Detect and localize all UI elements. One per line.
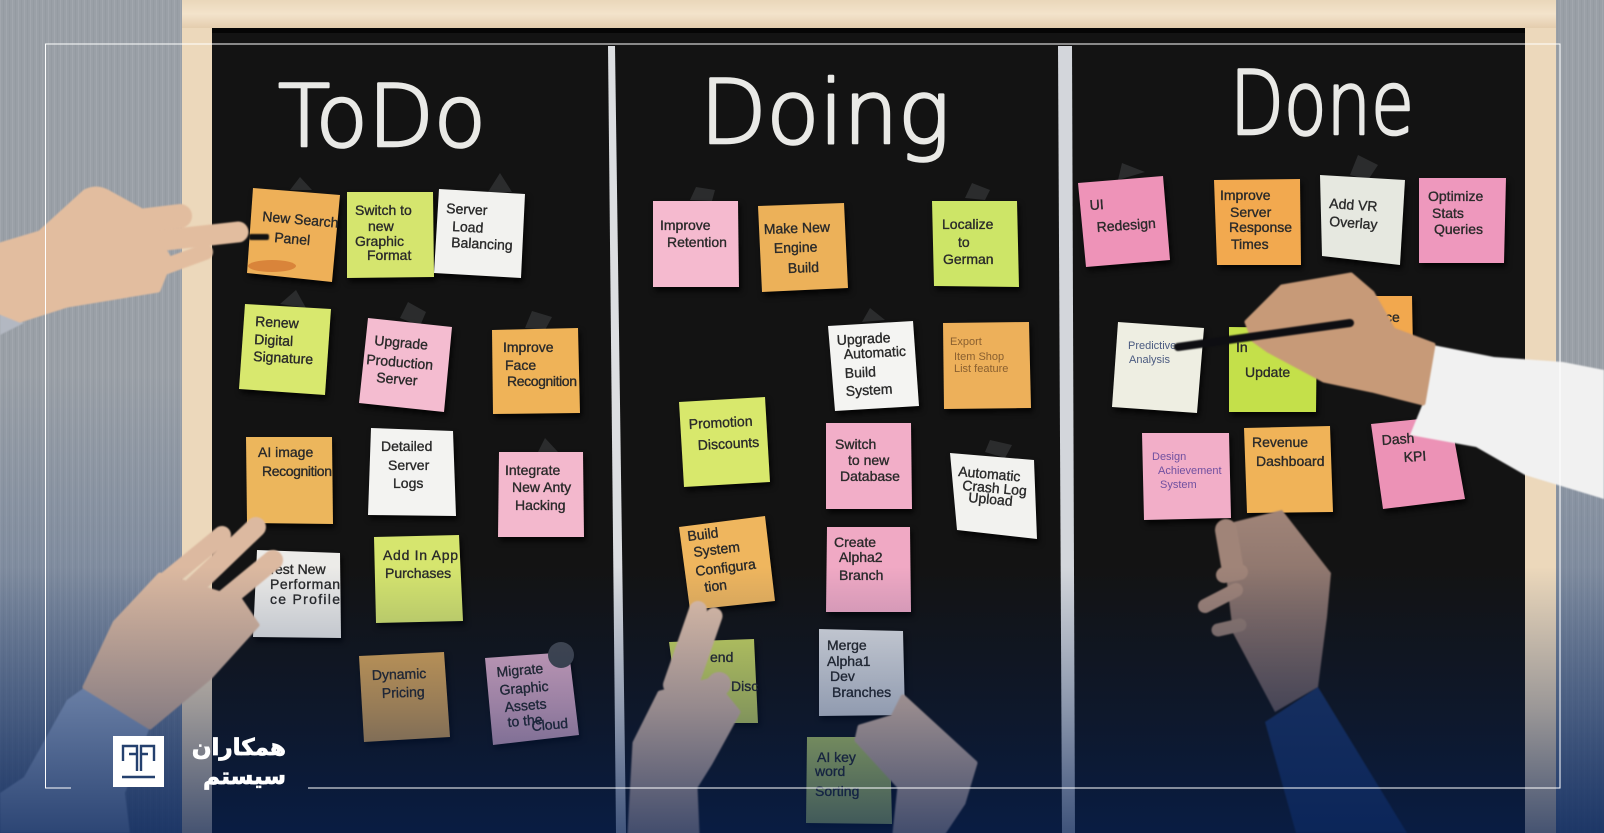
- note: Improve Server Response Times: Times: [1231, 236, 1269, 252]
- note: Test New Performance Profile: Test New: [268, 561, 326, 577]
- note: Add VR Overlay: [1320, 175, 1405, 265]
- note: Improve Face Recognition: [492, 328, 580, 414]
- note: UI Redesign: UI: [1089, 196, 1104, 213]
- note: Switch to new Database: Switch: [835, 436, 876, 452]
- note: Improve Retention: Retention: [667, 234, 727, 250]
- note: Build System Configuration: [679, 516, 775, 610]
- note: Automatic Crash Log Upload: [950, 453, 1037, 539]
- note: Revenue Dashboard: Revenue: [1252, 434, 1308, 450]
- column: ToDo notes: [239, 188, 584, 745]
- note: Switch to new Graphic Format: Format: [367, 247, 411, 263]
- note: Integrate New Anty Hacking: [498, 452, 584, 537]
- note: AI keyword Sorting: Sorting: [815, 783, 859, 799]
- note: Update: In: [1236, 339, 1248, 355]
- note: Add In App Purchases: [374, 535, 463, 623]
- note: Upgrade Production Server: Upgrade: [374, 332, 429, 353]
- note: Improve Face Recognition: Improve: [503, 339, 554, 355]
- note: Automatic Crash Log Upload: Crash Log: [962, 477, 1027, 499]
- note: UI Redesign: [1078, 176, 1170, 267]
- note: Switch to new Database: [826, 423, 912, 509]
- hand: dark hand with navy sleeve: [1205, 510, 1407, 833]
- note: AI image Recognition: AI image: [258, 444, 313, 460]
- note: Promotion Discounts: [679, 397, 770, 487]
- note: Predictive Analysis: [1112, 322, 1204, 413]
- note: Improve Retention: Improve: [660, 217, 711, 233]
- note: Export Item Shop List feature: List feature: [954, 363, 1008, 375]
- note: Upgrade Automatic Build System: System: [845, 381, 893, 399]
- note: AI image Recognition: [246, 437, 333, 524]
- note: Automatic Crash Log Upload: Automatic: [958, 463, 1021, 484]
- note: Improve Server Response Times: Improve: [1220, 187, 1271, 203]
- note: Add In App Purchases: Purchases: [385, 565, 451, 581]
- note: Predictive Analysis: Analysis: [1129, 354, 1170, 366]
- note: Create Alpha2 Branch: Alpha2: [839, 549, 883, 565]
- note: Optimize Stats Queries: [1419, 178, 1506, 263]
- note: Add VR Overlay: Overlay: [1329, 213, 1378, 232]
- note: Detailed Server Logs: [368, 428, 456, 516]
- column: Done notes: [1078, 175, 1506, 520]
- hand: right hand with pen and white sleeve: [1178, 275, 1604, 499]
- note: orange partly hidden: [1372, 296, 1413, 350]
- note: Add In App Purchases: Add In App: [383, 547, 458, 563]
- note: Make New Engine Build: [758, 203, 848, 292]
- note: AI image Recognition: Recognition: [262, 463, 332, 479]
- logo wordmark: [192, 735, 286, 790]
- chalkboard: [212, 28, 1525, 833]
- note: Send Disc: end: [710, 649, 733, 665]
- note: Design Achievement System: Design: [1152, 451, 1186, 463]
- note: Build System Configuration: System: [692, 538, 741, 560]
- note: Migrate Graphic Assets to the Cloud: Migrate: [496, 660, 544, 680]
- note: Merge Alpha1 Dev Branches: [819, 629, 905, 716]
- note: Improve Server Response Times: Response: [1229, 219, 1292, 235]
- heading: Doing: Doing: [700, 61, 950, 164]
- note: Design Achievement System: System: [1160, 479, 1197, 491]
- note: UI Redesign: Redesign: [1096, 215, 1156, 235]
- logo mark: [113, 736, 164, 787]
- note: Merge Alpha1 Dev Branches: Merge: [827, 637, 867, 653]
- note: Test New Performance Profile: Performan: [270, 576, 340, 592]
- note: Migrate Graphic Assets to the Cloud: Assets: [504, 695, 547, 715]
- heading: ToDo: ToDo: [278, 67, 486, 167]
- note: Create Alpha2 Branch: Create: [834, 534, 876, 550]
- note: Integrate New Anty Hacking: Hacking: [515, 497, 566, 513]
- note: Export Item Shop List feature: [943, 322, 1031, 409]
- note: Merge Alpha1 Dev Branches: Alpha1: [827, 653, 871, 669]
- note: Upgrade Production Server: [359, 318, 452, 412]
- note: Localize to German: German: [943, 251, 994, 267]
- note: Promotion Discounts: Promotion: [688, 413, 753, 432]
- note: Build System Configuration: Build: [686, 524, 719, 544]
- note: Switch to new Graphic Format: new: [368, 218, 395, 234]
- note: Migrate Graphic Assets to the Cloud: Cloud: [531, 715, 569, 734]
- note: New Search Panel: New Search: [262, 208, 339, 231]
- hand: bottom centre left: [630, 610, 738, 833]
- logo wordmark: سیستم: [203, 764, 286, 790]
- note: Localize to German: to: [958, 234, 970, 250]
- tape pieces: [280, 155, 1378, 458]
- note: Improve Retention: [653, 201, 739, 287]
- note: Dashboard KPI: Dash: [1381, 430, 1415, 448]
- note: Merge Alpha1 Dev Branches: Branches: [832, 684, 891, 700]
- note: Server Load Balancing: Balancing: [451, 234, 513, 253]
- logo: [113, 735, 286, 790]
- note: Revenue Dashboard: Dashboard: [1256, 453, 1324, 469]
- note: Build System Configuration: Configura: [694, 556, 757, 579]
- note: orange partly hidden: ce: [1385, 309, 1400, 325]
- note: Localize to German: [932, 201, 1019, 287]
- note: Promotion Discounts: Discounts: [697, 434, 760, 453]
- note: Export Item Shop List feature: Item Shop: [954, 351, 1004, 363]
- note: Switch to new Database: to new: [848, 452, 890, 468]
- note: Upgrade Production Server: Production: [366, 351, 434, 373]
- note: Improve Server Response Times: [1214, 179, 1301, 265]
- note: Upgrade Automatic Build System: Automatic: [843, 343, 906, 362]
- note: Detailed Server Logs: Server: [388, 457, 430, 473]
- note: Make New Engine Build: Engine: [774, 238, 818, 256]
- note: Dynamic Pricing: [359, 652, 450, 742]
- note: Upgrade Production Server: Server: [376, 369, 419, 389]
- note: Update: Update: [1245, 364, 1290, 380]
- note: Design Achievement System: Achievement: [1158, 465, 1222, 477]
- note: New Search Panel: [247, 188, 340, 282]
- note: Test New Performance Profile: [253, 550, 341, 638]
- note: Send Disc: Disc: [731, 678, 758, 694]
- note: Integrate New Anty Hacking: New Anty: [512, 479, 571, 495]
- note: New Search Panel: Panel: [274, 229, 311, 248]
- note: Renew Digital Signature: Digital: [254, 331, 294, 349]
- column: Doing notes: [653, 201, 1037, 824]
- note: Dashboard KPI: KPI: [1403, 447, 1427, 465]
- hand: top left pointing with marker: [0, 189, 269, 335]
- note: Update: [1229, 327, 1317, 412]
- note: Localize to German: Localize: [942, 216, 994, 232]
- note: Test New Performance Profile: ce Profile: [270, 591, 340, 607]
- note: Predictive Analysis: Predictive: [1128, 340, 1176, 352]
- note: AI keyword Sorting: AI key: [817, 749, 856, 765]
- note: Merge Alpha1 Dev Branches: Dev: [830, 668, 855, 684]
- note: Server Load Balancing: [434, 189, 525, 278]
- note: Renew Digital Signature: Renew: [255, 313, 300, 331]
- note: Improve Server Response Times: Server: [1230, 204, 1272, 220]
- note: Upgrade Automatic Build System: Build: [844, 363, 876, 381]
- magnet pin: [548, 642, 574, 668]
- chalk dividers: [608, 46, 1075, 833]
- note: Revenue Dashboard: [1244, 426, 1333, 513]
- note: AI keyword Sorting: [806, 737, 892, 824]
- note: Optimize Stats Queries: Optimize: [1428, 188, 1483, 204]
- note: Migrate Graphic Assets to the Cloud: Graphic: [499, 678, 549, 698]
- note: Add VR Overlay: Add VR: [1329, 195, 1378, 214]
- note: Optimize Stats Queries: Queries: [1434, 221, 1483, 237]
- heading: Done: Done: [1230, 52, 1414, 155]
- note: Detailed Server Logs: Detailed: [381, 438, 432, 454]
- note: Upgrade Automatic Build System: Upgrade: [836, 329, 891, 348]
- note: Switch to new Graphic Format: [347, 192, 434, 278]
- note: Server Load Balancing: Server: [446, 200, 488, 218]
- hand: bottom left with sleeve: [0, 527, 273, 833]
- note: Build System Configuration: tion: [703, 576, 728, 595]
- note: Switch to new Database: Database: [840, 468, 900, 484]
- note: Automatic Crash Log Upload: Upload: [968, 489, 1013, 509]
- note: Switch to new Graphic Format: Graphic: [355, 233, 404, 249]
- logo wordmark: همکاران: [192, 735, 286, 761]
- note: Dashboard KPI: [1371, 416, 1465, 509]
- note: Create Alpha2 Branch: [826, 527, 911, 612]
- note: AI keyword Sorting: word: [814, 763, 845, 779]
- note: Create Alpha2 Branch: Branch: [839, 567, 883, 583]
- note: Upgrade Automatic Build System: [828, 321, 919, 411]
- note: Detailed Server Logs: Logs: [393, 475, 423, 491]
- note: Dynamic Pricing: Dynamic: [372, 665, 427, 683]
- note: Migrate Graphic Assets to the Cloud: [485, 652, 579, 745]
- hand: bottom centre right holding note: [857, 697, 975, 833]
- note: Send Disc: [669, 639, 758, 723]
- note: Improve Face Recognition: Face: [505, 357, 536, 373]
- note: Dynamic Pricing: Pricing: [382, 684, 425, 701]
- note: Renew Digital Signature: [239, 304, 331, 395]
- note: Design Achievement System: [1142, 433, 1231, 520]
- note: Optimize Stats Queries: Stats: [1432, 205, 1464, 221]
- note: Switch to new Graphic Format: Switch to: [355, 202, 412, 218]
- note: Improve Face Recognition: Recognition: [507, 373, 577, 389]
- note: Renew Digital Signature: Signature: [253, 348, 314, 367]
- note: Server Load Balancing: Load: [452, 218, 484, 236]
- note: Migrate Graphic Assets to the Cloud: to the: [507, 711, 543, 730]
- note: Make New Engine Build: Build: [788, 259, 819, 276]
- note: Integrate New Anty Hacking: Integrate: [505, 462, 560, 478]
- note: Export Item Shop List feature: Export: [950, 336, 982, 348]
- note: Make New Engine Build: Make New: [764, 219, 831, 237]
